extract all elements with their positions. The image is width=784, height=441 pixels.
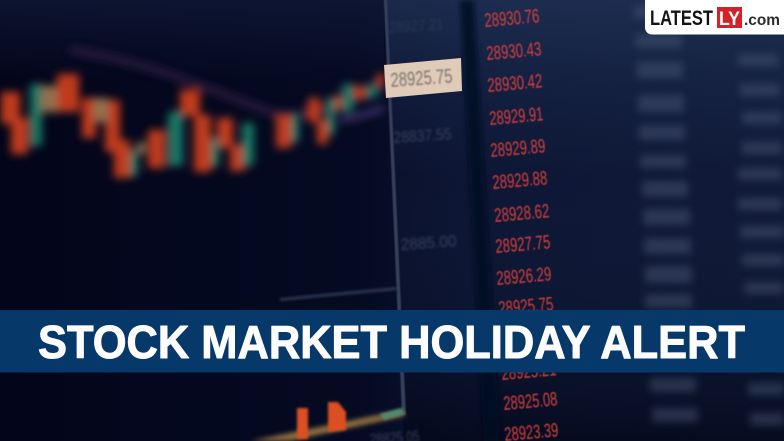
red price column: 28925.75 [498, 293, 554, 320]
logo red box: LY [719, 8, 740, 30]
logo domain: .com [744, 12, 780, 29]
price tag value: 28925.75 [390, 66, 453, 92]
faded axis labels: 28927.21 [388, 16, 444, 37]
red price column: 28925.08 [503, 388, 558, 415]
red price column: 28929.91 [489, 103, 544, 130]
logo wordmark: LATEST [650, 7, 713, 30]
red price column: 28929.88 [492, 167, 548, 194]
candlestick chart [1, 50, 385, 178]
faded axis labels [369, 16, 457, 441]
price tag [384, 58, 462, 98]
red price column: 28930.76 [484, 5, 540, 32]
logo badge [645, 0, 784, 34]
red price column: 28926.29 [496, 263, 552, 290]
moving average line [70, 50, 385, 114]
red price column [484, 5, 559, 441]
headline banner [0, 310, 784, 372]
red price column: 28929.89 [490, 135, 546, 162]
volume bars [297, 402, 346, 439]
red price column: 28928.62 [494, 200, 550, 227]
red price column: 28930.43 [486, 38, 542, 65]
red price column: 28930.42 [487, 70, 543, 97]
faded axis labels: 2885.00 [400, 233, 457, 254]
red price column: 28927.75 [495, 231, 551, 258]
lower volume chart [250, 402, 405, 441]
red price column: 28925.21 [501, 358, 557, 385]
blurred data columns [634, 6, 784, 425]
faded axis labels: 28837.55 [393, 126, 452, 147]
headline text: STOCK MARKET HOLIDAY ALERT [38, 316, 745, 368]
